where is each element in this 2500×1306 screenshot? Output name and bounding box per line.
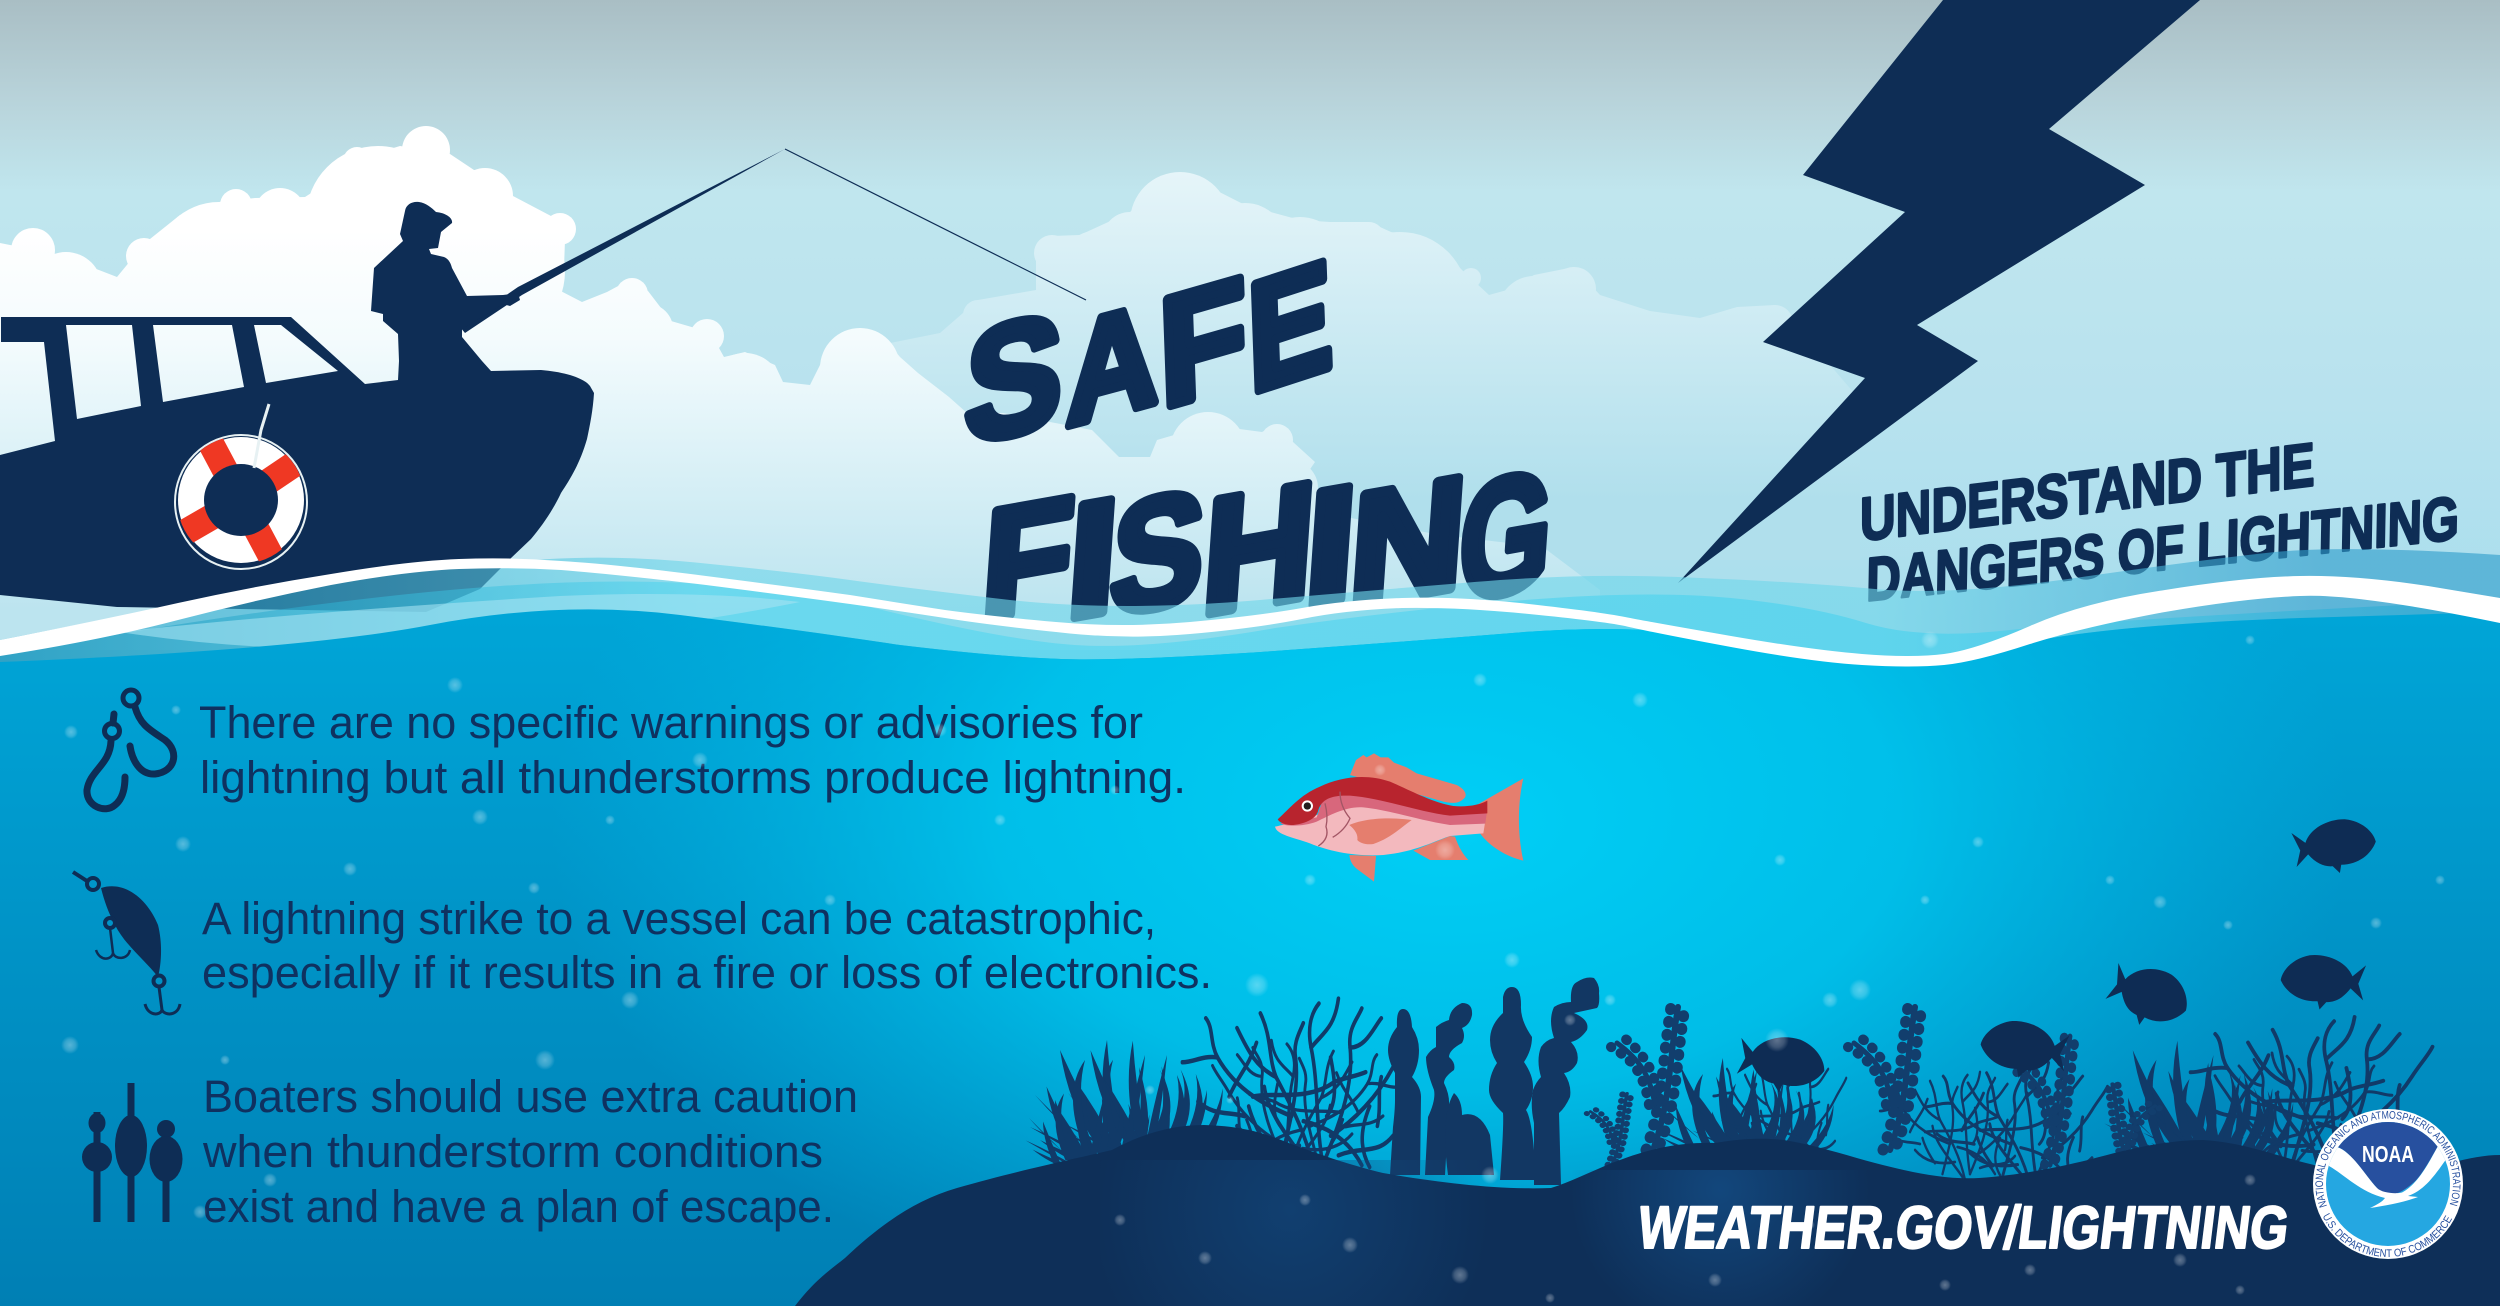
coral reef silhouettes [1026, 978, 2432, 1185]
subtitle: understand the dangers of lightning: UNDERSTAND THE [1860, 430, 2315, 554]
kelp [1388, 978, 1599, 1185]
underwater bubbles [61, 631, 2445, 1303]
text: lightning strike to a vessel: especially if it results in a fire or loss of electronics. [202, 947, 1212, 998]
text: boaters use caution: Boaters should use extra caution [203, 1071, 858, 1122]
title: FISHING: I [1061, 463, 1125, 655]
title: SAFE: S [962, 279, 1066, 480]
fishing rod [460, 149, 785, 333]
text: no specific warnings [199, 697, 1186, 803]
title: SAFE: A [1066, 272, 1158, 457]
title: FISHING [977, 434, 1558, 655]
title: FISHING: S [1105, 456, 1211, 651]
text: no specific warnings: lightning but all thunderstorms produce lightning. [200, 752, 1186, 803]
icon: bobbers [82, 1083, 182, 1222]
text: boaters use caution: when thunderstorm conditions [202, 1126, 823, 1177]
red snapper fish [1275, 753, 1523, 882]
white wave line [0, 558, 2500, 666]
text: boaters use caution [202, 1071, 858, 1232]
icon: fishing lure [73, 872, 180, 1014]
back clouds [880, 172, 1860, 560]
text: lightning strike to a vessel: A lightning strike to a vessel can be catastrophic, [202, 893, 1156, 944]
title: SAFE: F [1157, 244, 1249, 440]
waves: translucent surface layers [0, 549, 2500, 800]
title: FISHING: F [977, 464, 1078, 654]
seabed mound [795, 1125, 2500, 1306]
title: FISHING: G [1453, 434, 1558, 637]
noaa logo: U.S. DEPARTMENT OF COMMERCE [2324, 1213, 2452, 1257]
text: lightning strike to a vessel [202, 893, 1212, 998]
title: FISHING: H [1198, 447, 1320, 650]
text: no specific warnings: There are no specific warnings or advisories for [199, 697, 1143, 748]
title: SAFE [962, 228, 1335, 480]
noaa logo: NOAA [2362, 1141, 2414, 1167]
noaa logo [2313, 1109, 2463, 1259]
branching corals [1182, 999, 2432, 1185]
bubble corals [1587, 1007, 2159, 1170]
boat silhouette [0, 202, 594, 612]
boat with fisherman [0, 149, 785, 612]
sky background [0, 0, 2500, 800]
title: SAFE: E [1245, 228, 1335, 426]
front clouds [0, 126, 1600, 650]
fish silhouettes [1732, 817, 2378, 1101]
life ring [175, 404, 307, 569]
fishing line [785, 149, 1086, 300]
grass clusters [1026, 1040, 2293, 1168]
title: FISHING: N [1345, 442, 1471, 641]
title: FISHING: I [1299, 450, 1363, 642]
text: boaters use caution: exist and have a plan of escape. [203, 1181, 834, 1232]
website url: WEATHER.GOV/LIGHTNING [1634, 1193, 2293, 1261]
lightning bolt [1678, 0, 2200, 583]
noaa logo: NATIONAL OCEANIC AND ATMOSPHERIC ADMINISTRATION [2315, 1110, 2461, 1208]
ocean [0, 609, 2500, 1306]
icon: fish hooks [87, 690, 174, 809]
